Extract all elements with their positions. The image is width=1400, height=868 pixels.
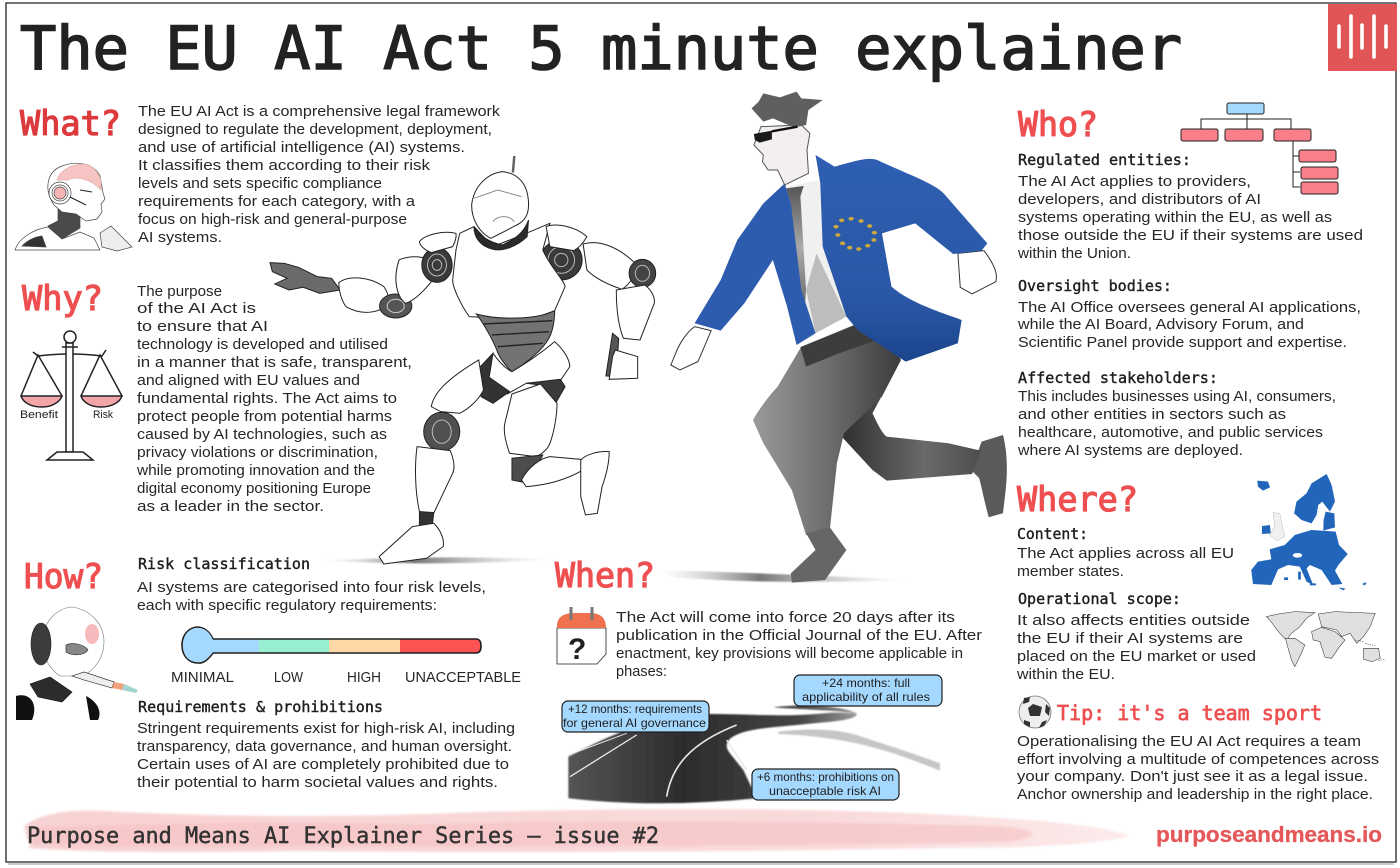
- text: what description: designed to regulate the development, deployment,: [138, 122, 492, 138]
- text: risk intro: [137, 580, 486, 614]
- text: requirements: [137, 721, 515, 791]
- text: requirements: their potential to harm societal values and rights.: [137, 775, 498, 791]
- text: what description: It classifies them according to their risk: [138, 158, 431, 174]
- callout: plus 6 months: +6 months: prohibitions on: [757, 770, 894, 784]
- callout: plus 24 months: applicability of all rules: [802, 690, 930, 704]
- text: why description: fundamental rights. The Act aims to: [137, 391, 397, 407]
- text: when description: phases:: [616, 664, 667, 680]
- hands: [671, 327, 711, 370]
- panel: tip: [1017, 696, 1379, 803]
- diagram: organisation chart: [1181, 103, 1338, 194]
- subheading: affected stakeholders: Affected stakeholders:: [1018, 369, 1218, 387]
- heading: how: How?: [24, 557, 103, 597]
- illustration: winding road: [568, 706, 940, 803]
- callout: plus 12 months: [562, 701, 709, 732]
- text: why description: technology is developed and utilised: [137, 337, 388, 353]
- icon: balance scales: Risk: [93, 409, 113, 421]
- callout: plus 24 months: +24 months: full: [822, 676, 910, 690]
- text: oversight bodies: [1017, 300, 1361, 351]
- jacket right panel and sleeve: [816, 155, 987, 362]
- footer: [24, 809, 1382, 852]
- text: affected stakeholders: healthcare, automotive, and public services: [1018, 425, 1323, 441]
- icon: soccer ball: [1019, 696, 1051, 728]
- illustration: man in EU blazer: [659, 92, 1007, 583]
- text: why description: in a manner that is safe, transparent,: [137, 355, 412, 371]
- glasses: [754, 131, 772, 143]
- heading: when: When?: [555, 556, 655, 596]
- heading: why: Why?: [22, 279, 103, 319]
- text: what description: and use of artificial intelligence (AI) systems.: [138, 140, 465, 156]
- text: what description: AI systems.: [138, 230, 222, 246]
- rear shoe: [971, 435, 1007, 517]
- text: affected stakeholders: This includes businesses using AI, consumers,: [1018, 389, 1336, 405]
- icon: balance scales: Benefit: [20, 409, 58, 421]
- text: tip: effort involving a multitude of competences across: [1017, 752, 1379, 768]
- text: tip: Operationalising the EU AI Act requires a team: [1017, 734, 1361, 750]
- text: why description: and aligned with EU values and: [137, 373, 360, 389]
- chart: risk thermometer scale: UNACCEPTABLE: [405, 670, 521, 686]
- subheading: operational scope: Operational scope:: [1018, 590, 1181, 608]
- text: oversight bodies: Scientific Panel provide support and expertise.: [1018, 335, 1347, 351]
- logo: [1328, 4, 1397, 71]
- callout: plus 6 months: [752, 769, 899, 800]
- text: content: [1017, 546, 1234, 580]
- text: why description: to ensure that AI: [137, 319, 268, 335]
- text: requirements: transparency, data governance, and human oversight.: [137, 739, 512, 755]
- heading: tip: Tip: it's a team sport: [1057, 701, 1322, 725]
- robot left hand: [270, 263, 340, 293]
- front leg: [753, 323, 901, 535]
- callout: plus 6 months: unacceptable risk AI: [769, 784, 881, 798]
- jacket left panel and sleeve: [695, 183, 816, 345]
- text: why description: privacy violations or discrimination,: [137, 445, 378, 461]
- icon: android profile: [15, 163, 132, 251]
- face: [754, 125, 810, 185]
- text: regulated entities: systems operating within the EU, as well as: [1018, 210, 1332, 226]
- front shoe: [791, 527, 846, 583]
- heading: what: What?: [20, 104, 121, 144]
- chart: risk thermometer scale: MINIMAL: [171, 670, 234, 686]
- text: operational scope: within the EU.: [1016, 667, 1115, 683]
- subheading: risk classification: Risk classification: [138, 555, 310, 573]
- text: why description: [136, 284, 412, 515]
- text: when description: enactment, key provisions will become applicable in: [616, 646, 963, 662]
- panel: how: [16, 555, 521, 791]
- shirt: [787, 180, 846, 333]
- text: tip: your company. Don't just see it as a legal issue.: [1017, 769, 1368, 785]
- text: what description: requirements for each category, with a: [138, 194, 416, 210]
- text: tip: Anchor ownership and leadership in the right place.: [1017, 787, 1373, 803]
- website: purposeandmeans.io: [1156, 822, 1382, 847]
- heading: where: Where?: [1017, 480, 1138, 520]
- text: why description: of the AI Act is: [137, 301, 256, 317]
- text: oversight bodies: while the AI Board, Advisory Forum, and: [1017, 317, 1304, 333]
- text: tip: [1017, 734, 1379, 803]
- subheading: regulated entities: Regulated entities:: [1018, 151, 1191, 169]
- text: why description: protect people from potential harms: [137, 409, 392, 425]
- callout: plus 12 months: +12 months: requirements: [568, 702, 702, 716]
- chart: risk thermometer scale: HIGH: [347, 670, 381, 686]
- subheading: oversight bodies: Oversight bodies:: [1018, 277, 1172, 295]
- rear leg: [839, 360, 981, 481]
- text: when description: [616, 610, 982, 680]
- text: what description: focus on high-risk and general-purpose: [138, 212, 407, 228]
- footer brush band: [24, 809, 1130, 852]
- text: affected stakeholders: where AI systems are deployed.: [1017, 443, 1243, 459]
- series label: Purpose and Means AI Explainer Series – issue #2: [27, 824, 659, 849]
- title: The EU AI Act 5 minute explainer: [20, 14, 1182, 84]
- chart: risk thermometer scale: LOW: [274, 670, 303, 686]
- icon: robot with thermometer: [16, 607, 138, 720]
- text: why description: while promoting innovation and the: [136, 463, 375, 479]
- tie: [786, 186, 806, 323]
- text: what description: The EU AI Act is a comprehensive legal framework: [138, 104, 501, 120]
- text: what description: levels and sets specific compliance: [138, 176, 382, 192]
- text: why description: as a leader in the sector.: [137, 499, 324, 515]
- text: operational scope: the EU if their AI systems are: [1017, 631, 1243, 647]
- text: risk intro: each with specific regulatory requirements:: [137, 598, 437, 614]
- text: operational scope: [1016, 613, 1256, 683]
- callout: plus 24 months: [794, 675, 942, 706]
- icon: world map: [1266, 612, 1385, 667]
- text: affected stakeholders: [1017, 389, 1336, 459]
- text: regulated entities: within the Union.: [1017, 246, 1131, 262]
- text: regulated entities: developers, and distributors of AI: [1018, 192, 1261, 208]
- text: regulated entities: The AI Act applies to providers,: [1018, 174, 1251, 190]
- text: when description: publication in the Official Journal of the EU. After: [616, 628, 982, 644]
- text: oversight bodies: The AI Office oversees general AI applications,: [1018, 300, 1361, 316]
- panel: where: [1016, 474, 1385, 683]
- chart: risk thermometer scale: [171, 627, 521, 686]
- icon: calendar: ?: [568, 633, 586, 666]
- text: operational scope: placed on the EU market or used: [1017, 649, 1256, 665]
- text: requirements: Stringent requirements exist for high-risk AI, including: [137, 721, 515, 737]
- panel: who: [1017, 103, 1363, 459]
- illustration: robot running: [270, 156, 656, 564]
- hair: [752, 92, 823, 127]
- text: what description: [138, 104, 501, 246]
- subheading: requirements and prohibitions: Requirements & prohibitions: [138, 698, 383, 716]
- text: regulated entities: those outside the EU if their systems are used: [1018, 228, 1363, 244]
- text: content: member states.: [1017, 564, 1124, 580]
- panel: what: [15, 104, 501, 251]
- panel: why: [20, 279, 412, 515]
- panel: when: [555, 556, 982, 803]
- text: why description: digital economy positioning Europe: [137, 481, 371, 497]
- text: when description: The Act will come into force 20 days after its: [616, 610, 955, 626]
- icon: balance scales: [20, 331, 122, 460]
- text: affected stakeholders: and other entities in sectors such as: [1018, 407, 1286, 423]
- text: risk intro: AI systems are categorised into four risk levels,: [137, 580, 486, 596]
- text: requirements: Certain uses of AI are completely prohibited due to: [137, 757, 509, 773]
- text: why description: The purpose: [137, 284, 222, 300]
- text: operational scope: It also affects entities outside: [1017, 613, 1250, 629]
- EU stars: [833, 217, 877, 251]
- icon: calendar: [557, 607, 606, 666]
- callout: plus 12 months: for general AI governance: [563, 716, 706, 730]
- heading: who: Who?: [1018, 105, 1098, 145]
- text: regulated entities: [1017, 174, 1363, 262]
- text: content: The Act applies across all EU: [1017, 546, 1234, 562]
- text: why description: caused by AI technologies, such as: [137, 427, 387, 443]
- subheading: content: Content:: [1017, 525, 1088, 543]
- icon: Europe map: [1251, 474, 1366, 590]
